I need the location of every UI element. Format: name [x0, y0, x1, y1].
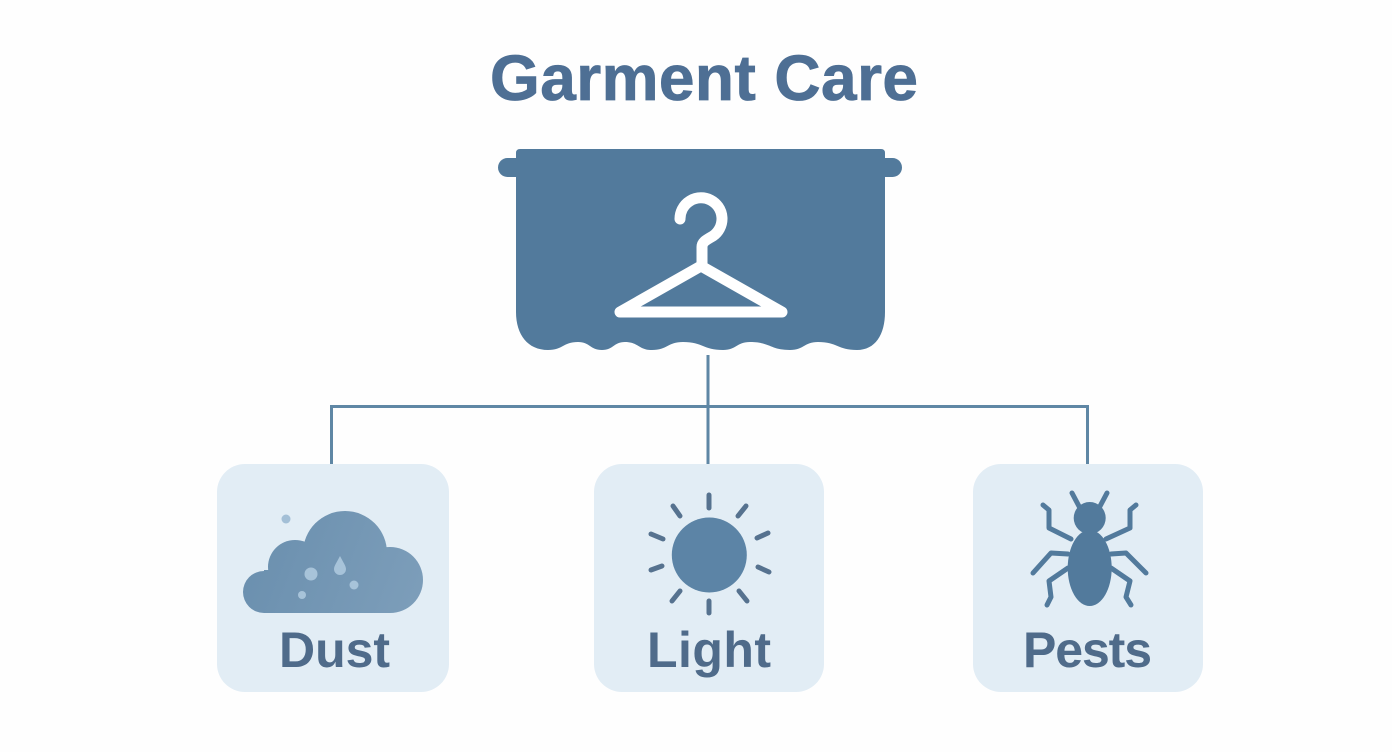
panel: dust: [217, 464, 449, 692]
icon: hanger: [620, 198, 782, 312]
card background: [973, 464, 1203, 692]
curtain rod: [498, 158, 902, 177]
icon: dust cloud: [243, 511, 423, 613]
icon: bug: [1033, 493, 1146, 606]
valance body: [516, 149, 885, 350]
panel: light: [594, 464, 824, 692]
title: Garment Care: [490, 42, 918, 114]
icon: sun: [651, 495, 769, 613]
label: Light: Light: [647, 622, 771, 678]
panel: garment care valance: [498, 149, 902, 350]
connector lines: [332, 355, 1088, 464]
card background: [594, 464, 824, 692]
label: Pests: Pests: [1023, 622, 1152, 678]
panel: pests: [973, 464, 1203, 692]
label: Dust: Dust: [279, 622, 390, 678]
card background: [217, 464, 449, 692]
